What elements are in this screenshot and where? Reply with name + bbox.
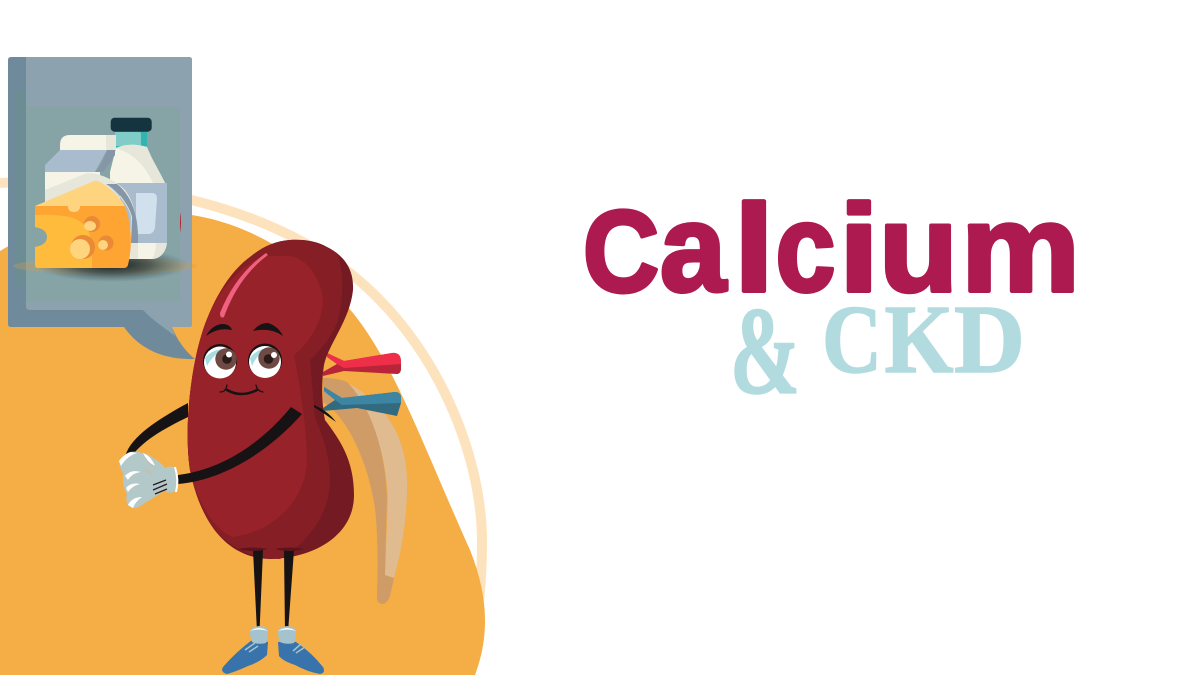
left leg [253,550,263,632]
title: Calcium: u [879,180,958,318]
right eye [248,344,282,378]
title: Calcium: c [776,180,836,318]
subtitle: & CKD: & [730,283,800,421]
title: Calcium: i [839,180,879,318]
title: Calcium: C [583,186,659,316]
subtitle: & CKD [730,283,1025,421]
pale ring arc [0,182,482,610]
renal vein [323,387,401,416]
right arm [178,407,302,484]
kidney face tone [188,256,323,537]
eyebrows [206,323,283,336]
subtitle: & CKD: C [822,286,882,394]
highlight [220,253,268,318]
icon: milk carton [45,135,138,259]
faint warm band [13,258,197,274]
icon: milk bottle [108,118,167,259]
smile [220,385,263,394]
red sliver [180,212,181,233]
kidney mid tone [188,240,342,559]
left eye [203,344,237,378]
bubble body [8,57,195,359]
renal artery [323,353,401,376]
right shoe [278,626,324,674]
ureter [323,378,407,604]
food shadow [36,248,188,282]
bubble lighter face [26,57,192,336]
title: Calcium [583,180,1080,318]
speech bubble with dairy foods [8,57,197,359]
kidney outer dark [188,240,354,559]
subtitle: & CKD: K [884,286,954,394]
orange background blob [0,212,485,675]
title: Calcium: m [961,180,1080,318]
icon: cheese wedge [35,181,131,268]
glove hand [119,452,178,508]
title: Calcium: a [660,180,727,318]
right leg [284,550,294,632]
kidney character [119,240,407,674]
subtitle: & CKD: D [954,286,1025,394]
left shoe [222,626,268,674]
inner tinted panel [26,107,180,302]
title: Calcium: l [734,180,774,318]
arm behind [125,403,188,459]
